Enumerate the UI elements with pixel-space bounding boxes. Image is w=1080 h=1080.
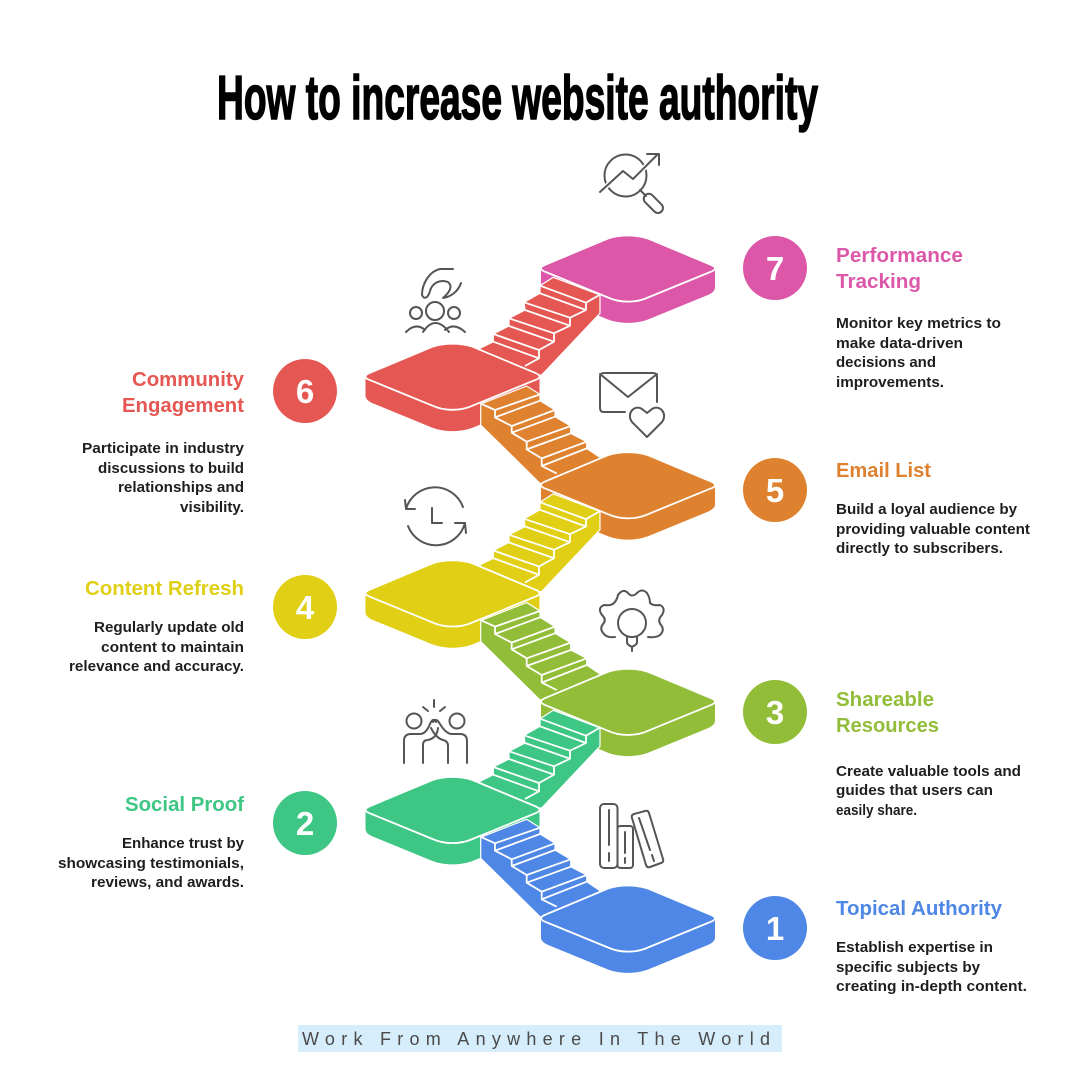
staircases (480, 277, 600, 917)
number badge 6 (273, 359, 337, 423)
text 6: relationships and (118, 480, 244, 496)
heading 7: Performance (836, 244, 963, 267)
text 4: Regularly update old (94, 620, 244, 636)
heading 3 (836, 688, 939, 737)
number badge 7 (743, 236, 807, 300)
stair: green, platform 2 to platform 3 (480, 710, 600, 808)
number badge 2: 2 (296, 805, 314, 842)
text 1: specific subjects by (836, 960, 980, 976)
text 5: directly to subscribers. (836, 541, 1003, 557)
platform side faces (366, 268, 715, 973)
heading 3: Resources (836, 714, 939, 737)
text 7: decisions and (836, 355, 936, 371)
text 3 (836, 764, 1021, 819)
icon: books (600, 804, 663, 868)
platform top faces (366, 236, 715, 952)
stair: lime, platform 4 to platform 3 (481, 603, 600, 700)
number badge 3: 3 (766, 694, 784, 731)
heading 7 (836, 244, 963, 293)
step 7: Performance Tracking (743, 236, 1001, 391)
stair: red, platform 6 to platform 7 (480, 277, 600, 375)
heading 6: Community (132, 368, 245, 391)
text 5 (836, 502, 1030, 557)
step 5: Email List (743, 458, 1030, 557)
step 2: Social Proof (58, 791, 337, 891)
step 3: Shareable Resources (743, 680, 1021, 819)
text 3: Create valuable tools and (836, 764, 1021, 780)
heading 2: Social Proof (125, 793, 244, 816)
text 4 (69, 620, 244, 675)
number badge 1 (743, 896, 807, 960)
text 5: providing valuable content (836, 522, 1030, 538)
heading 7: Tracking (836, 270, 921, 293)
text 5: Build a loyal audience by (836, 502, 1017, 518)
step 1: Topical Authority (743, 896, 1027, 995)
heading 4: Content Refresh (85, 577, 244, 600)
step 6: Community Engagement (82, 359, 337, 516)
heading 1: Topical Authority (836, 897, 1003, 920)
icon: chart and magnifier (600, 154, 665, 215)
text 1: creating in-depth content. (836, 979, 1027, 995)
text 1: Establish expertise in (836, 940, 993, 956)
heading 6: Engagement (122, 394, 244, 417)
number badge 4: 4 (296, 589, 315, 626)
text 4: relevance and accuracy. (69, 659, 244, 675)
icon: envelope with heart (600, 373, 664, 437)
icon: clock with circular arrows (405, 487, 466, 545)
text 2: reviews, and awards. (91, 875, 244, 891)
text 6: discussions to build (98, 461, 244, 477)
text 2 (58, 836, 244, 891)
text 7: make data-driven (836, 336, 963, 352)
number badge 3 (743, 680, 807, 744)
icon: gear with light bulb (600, 590, 664, 651)
text 3: easily share. (836, 803, 917, 819)
number badge 5: 5 (766, 472, 784, 509)
text 6 (82, 441, 244, 516)
heading 3: Shareable (836, 688, 934, 711)
heading 6 (122, 368, 245, 417)
footer banner: Work From Anywhere In The World (302, 1029, 770, 1049)
heading 5: Email List (836, 459, 931, 482)
text 7: Monitor key metrics to (836, 316, 1001, 332)
number badge 1: 1 (766, 910, 784, 947)
stair: orange, platform 6 to platform 5 (481, 386, 600, 483)
text 6: visibility. (180, 500, 244, 516)
text 4: content to maintain (101, 640, 244, 656)
text 7: improvements. (836, 375, 944, 391)
number badge 5 (743, 458, 807, 522)
number badge 6: 6 (296, 373, 314, 410)
text 6: Participate in industry (82, 441, 244, 457)
text 3: guides that users can (836, 783, 993, 799)
number badge 4 (273, 575, 337, 639)
text 1 (836, 940, 1027, 995)
text 2: Enhance trust by (122, 836, 244, 852)
icon: high five (404, 700, 467, 763)
icon: community people and hand (406, 269, 465, 332)
stair: yellow, platform 4 to platform 5 (480, 494, 600, 592)
number badge 7: 7 (766, 250, 784, 287)
stair: blue, platform 2 to platform 1 (481, 819, 600, 917)
text 7 (836, 316, 1001, 391)
text 2: showcasing testimonials, (58, 856, 244, 872)
step 4: Content Refresh (69, 575, 337, 675)
number badge 2 (273, 791, 337, 855)
